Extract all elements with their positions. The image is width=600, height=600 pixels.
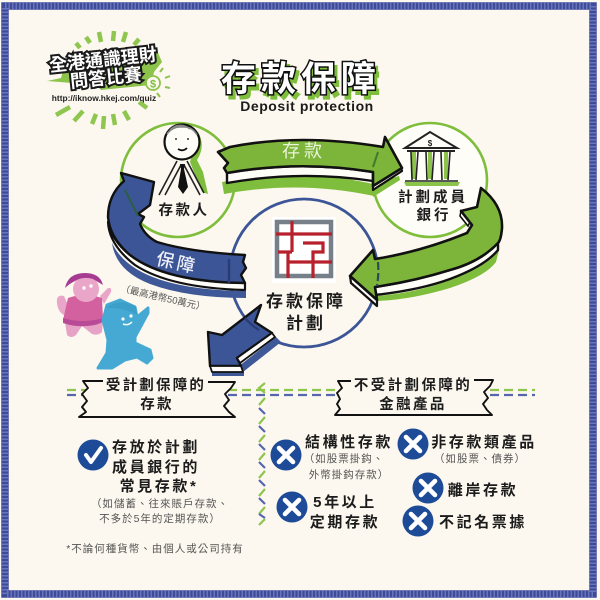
icon: cross <box>270 440 302 470</box>
scheme circle <box>230 199 378 347</box>
icon: scheme logo <box>272 217 336 283</box>
pink arms and legs <box>57 288 111 315</box>
pink head <box>73 276 99 302</box>
bank label: 計劃成員 <box>398 188 468 206</box>
bank roof <box>405 132 457 148</box>
item text: 非存款類產品 <box>431 433 537 451</box>
not covered: non-deposit products <box>398 428 537 465</box>
icon: cross <box>402 506 434 536</box>
badge green splash <box>47 48 162 90</box>
banner: not covered products <box>335 376 493 415</box>
bank label: 銀行 <box>416 206 452 224</box>
bank columns <box>405 152 458 181</box>
badge heading <box>48 44 158 92</box>
arrow shadow <box>222 176 400 197</box>
scheme label: 計劃 <box>286 313 326 333</box>
not covered: offshore deposits <box>412 472 518 504</box>
banner: covered deposits: 存款 <box>140 395 174 413</box>
badge heading: 全港通識理財 <box>48 44 158 76</box>
scheme label: 存款保障 <box>266 291 346 311</box>
icon: cross <box>398 428 428 460</box>
covered item: 常見存款* <box>120 477 198 495</box>
title shadow: 存款保障 <box>224 64 384 103</box>
banner outline <box>79 381 235 417</box>
dashed divider lines <box>67 383 535 525</box>
covered item: （如儲蓄、往來賬戶存款、 <box>91 497 229 510</box>
item text: 不記名票據 <box>439 513 527 531</box>
arrow band <box>210 333 275 372</box>
banner text: 不受計劃保障的 <box>354 376 472 394</box>
arrow shadow <box>376 250 499 301</box>
person head <box>164 124 200 160</box>
not covered: long-term deposits: 定期存款 <box>310 513 380 531</box>
arrow band <box>375 243 498 295</box>
quiz badge <box>47 31 170 129</box>
banner outline <box>335 380 493 415</box>
title <box>221 60 384 103</box>
badge rays <box>56 31 147 129</box>
badge dollar icon: $ <box>150 78 156 90</box>
character: pink <box>57 273 111 337</box>
not covered: structured deposits: 外幣掛鈎存款） <box>309 468 389 481</box>
person body <box>159 161 204 195</box>
person tie <box>178 164 188 194</box>
covered item <box>78 438 229 525</box>
arrow body <box>108 173 246 283</box>
not covered: non-deposit products: （如股票、債券） <box>434 452 526 465</box>
arrow band <box>108 222 245 290</box>
arrow label: 存款 <box>282 141 326 161</box>
badge url: http://iknow.hkej.com/quiz <box>52 93 156 103</box>
banner: not covered products: 金融產品 <box>379 395 447 413</box>
not covered: structured deposits: （如股票掛鈎、 <box>304 452 384 465</box>
icon: bank: $ <box>428 139 433 148</box>
depositor circle <box>121 123 235 237</box>
character: blue <box>98 300 152 368</box>
pink dress <box>63 295 103 326</box>
arrow: protection (blue) <box>108 173 246 298</box>
bank green shade <box>404 152 460 186</box>
footnote: *不論何種貨幣、由個人或公司持有 <box>66 542 244 555</box>
icon: tick <box>78 440 108 470</box>
depositor label: 存款人 <box>158 201 210 219</box>
arrow band <box>227 166 373 183</box>
icon: bank <box>404 132 460 186</box>
covered item: 不多於5年的定期存款） <box>99 512 221 525</box>
item text: 離岸存款 <box>448 481 518 499</box>
arrow body <box>350 188 502 300</box>
arrow label: 保障 <box>154 249 200 277</box>
badge heading: 問答比賽 <box>69 63 143 92</box>
icon: cross <box>276 492 308 522</box>
cap note: （最高港幣50萬元） <box>119 282 207 314</box>
arrow body <box>208 305 272 366</box>
not covered: bearer instruments <box>402 506 527 536</box>
bank label <box>398 188 468 224</box>
icon: cross <box>412 472 444 504</box>
item text: 5年以上 <box>313 493 377 511</box>
title text: 存款保障 <box>221 60 381 99</box>
covered item: 成員銀行的 <box>112 458 200 476</box>
arrow body <box>218 137 402 186</box>
covered text: 存放於計劃 <box>112 438 200 456</box>
subtitle: Deposit protection <box>240 98 374 114</box>
not covered: long-term deposits <box>276 492 380 531</box>
bank circle <box>373 123 487 237</box>
person shadow <box>190 132 208 194</box>
arrow: deposit (green, top) <box>218 137 402 197</box>
icon: depositor <box>159 124 208 195</box>
not covered: structured deposits <box>270 433 393 481</box>
arrow: scheme to covered deposits <box>208 305 281 376</box>
banner: covered deposits <box>79 376 235 417</box>
scheme label <box>266 291 346 333</box>
item text: 結構性存款 <box>305 433 393 451</box>
banner text: 受計劃保障的 <box>106 376 206 394</box>
arrow: bank to scheme (green) <box>350 188 502 306</box>
arrow shadow <box>212 337 281 376</box>
arrow shadow <box>112 243 246 298</box>
